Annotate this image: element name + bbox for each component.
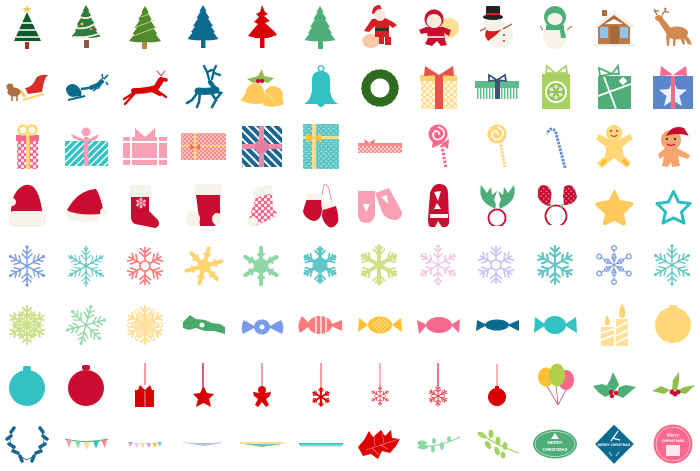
icon: snowflake lavender <box>477 246 515 284</box>
icon: thin bunting teal <box>299 443 343 446</box>
icon: snowflake teal solid <box>303 248 337 282</box>
badge: merry christmas oval: MERRY <box>548 440 563 445</box>
icon: teal candy <box>534 316 577 334</box>
badge: merry christmas diamond <box>595 424 634 464</box>
icon: blue gift with star <box>653 66 693 109</box>
icon: pink gift with cross bands <box>123 128 167 165</box>
icon: thin bunting yellow band <box>240 442 284 447</box>
icon: lime holly <box>652 372 695 396</box>
icon: blue sleigh silhouette <box>66 74 108 100</box>
icon: yellow dotted candy <box>358 316 402 334</box>
icon: snowflake pale mint <box>62 301 110 349</box>
icon: santa with sack <box>362 5 397 48</box>
icon: teal bauble <box>9 366 45 406</box>
icon: snowflake coral <box>126 247 164 285</box>
icon: snowflake teal <box>66 246 106 286</box>
icon: teal bell <box>304 66 338 107</box>
icon: mint branch <box>417 436 460 452</box>
icon: lime branch <box>476 430 519 458</box>
icon: spotted deer <box>654 8 692 46</box>
icon: snowflake pale lime <box>6 304 48 346</box>
icon: green striped gift navy bow <box>475 75 519 99</box>
icon: light green gift with bauble <box>542 66 570 109</box>
icon: pink candy <box>417 317 460 334</box>
icon: long ribbon gift <box>358 139 402 153</box>
icon: pink gift yellow bow <box>16 126 39 169</box>
icon: santa hat wide <box>65 189 108 222</box>
icon: red holly leaf <box>358 430 400 459</box>
icon: snowflake blue <box>7 246 47 286</box>
icon: snowflake pale yellow <box>122 302 168 348</box>
icon: snowflake pink <box>419 245 457 285</box>
icon: pink candy <box>428 124 449 168</box>
icon: blue tree <box>188 5 218 48</box>
icon: yellow bells with holly <box>240 69 284 107</box>
icon: teal tall gift <box>303 124 339 169</box>
icon: santa sleigh <box>6 75 48 101</box>
badge: merry christmas pink seal <box>654 424 692 464</box>
icon: small bunting lavender <box>128 442 162 448</box>
icon: green gift <box>598 66 631 109</box>
icon: red mittens <box>303 184 338 227</box>
icon: navy candy <box>476 320 519 331</box>
icon: snowy house <box>593 10 636 46</box>
icon: hanging gift <box>135 363 154 407</box>
icon: red bauble <box>68 365 104 406</box>
icon: laurel wreath <box>7 428 47 461</box>
icon: snowman with green hat <box>540 6 572 49</box>
icon: yellow gift red bow <box>420 66 457 109</box>
icon: leaping red reindeer <box>124 71 166 104</box>
icon: red stocking with snowflake <box>130 185 159 228</box>
icon: red stocking white heel <box>186 184 222 227</box>
icon: hanging outlined snowflake <box>428 363 448 406</box>
icon: red antler headband with dots <box>538 185 577 230</box>
icon: yellow candy <box>488 124 506 167</box>
badge: merry christmas diamond: MERRY CHRISTMAS <box>598 443 631 447</box>
icon: green tree with garlands <box>129 6 161 49</box>
icon: snowflake aqua <box>536 246 574 284</box>
icon: green antler headband <box>480 185 515 230</box>
icon: navy striped gift <box>242 126 282 167</box>
icon: salmon dotted flat gift <box>181 133 226 160</box>
icon: santa with yellow sack <box>419 10 459 46</box>
icon: snowflake yellow <box>183 244 225 288</box>
icon: green candy <box>183 315 225 334</box>
icon: wreath <box>362 70 398 106</box>
icon: snowflake lime <box>360 246 398 284</box>
icon: candles <box>601 303 628 346</box>
icon: decorated tree with star <box>14 5 41 49</box>
badge: merry christmas oval: CHRISTMAS <box>543 447 568 452</box>
icon: yellow star <box>595 188 634 225</box>
icon: hanging pale snowflake <box>371 363 389 405</box>
icon: coral candy <box>298 316 342 334</box>
icon: green tree <box>304 6 336 49</box>
icon: snowman with black hat <box>480 6 513 48</box>
icon: yellow gingerbread <box>596 125 633 168</box>
icon: teal striped gift <box>65 128 108 166</box>
badge: merry christmas oval <box>533 430 577 458</box>
icon: yellow bauble <box>655 305 691 343</box>
icon: santa hat large <box>8 185 46 227</box>
badge: merry christmas pink seal: CHRISTMAS <box>662 439 685 443</box>
icon: snowflake blue ringed <box>596 246 632 284</box>
icon: hanging snowflake <box>312 363 330 406</box>
badge: merry christmas pink seal: Merry <box>667 433 680 439</box>
icon: pink dotted stocking <box>248 184 277 227</box>
icon: teal outline star <box>657 192 690 223</box>
icon: large bunting <box>65 439 108 450</box>
icon: blue reindeer <box>187 66 221 107</box>
icon: green holly <box>593 372 636 398</box>
icon: hanging gingerbread <box>253 363 271 407</box>
icon: blue candy <box>242 320 283 334</box>
icon: thin bunting pastel <box>183 442 222 446</box>
icon: hanging star <box>193 363 214 407</box>
icon: red tree <box>248 5 277 48</box>
icon: orange gingerbread with hat <box>658 127 691 167</box>
icon: balloons <box>538 364 574 405</box>
icon: snowflake aqua thin <box>652 245 692 285</box>
icon: blue candy cane <box>547 129 565 168</box>
icon: tree with ornaments <box>72 5 100 48</box>
icon: red scarf <box>428 184 449 227</box>
icon: hanging red ball <box>488 364 506 406</box>
icon: snowflake mint <box>244 248 278 284</box>
icon: pink mittens <box>358 188 402 223</box>
